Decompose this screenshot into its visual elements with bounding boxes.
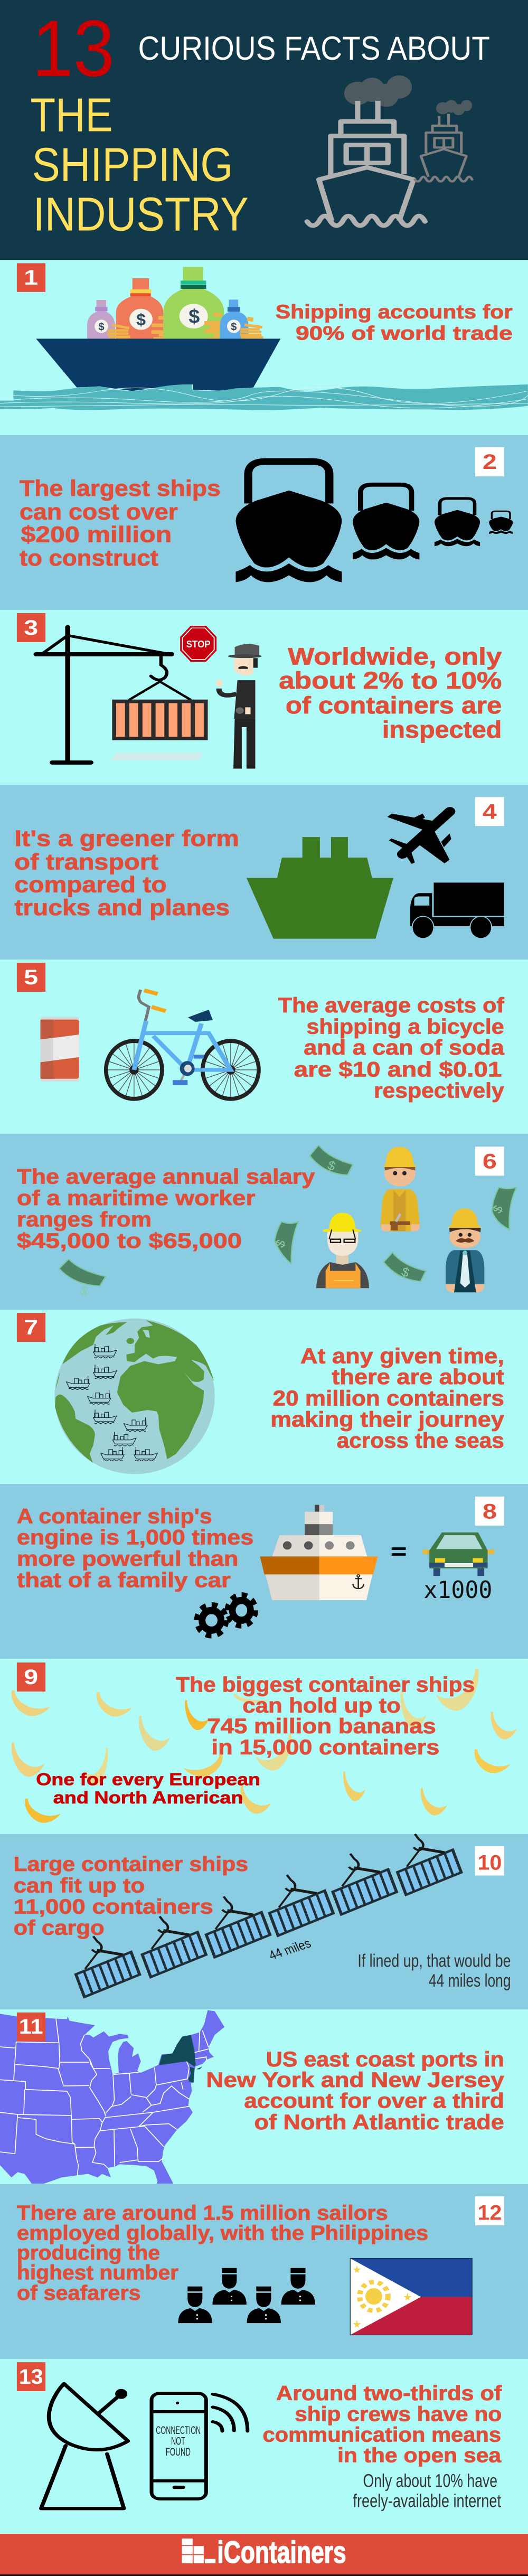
equals sign <box>392 1547 406 1556</box>
icon: cargo ship with money bags: $ <box>136 310 146 329</box>
label: x1000: x1000 <box>423 1576 492 1604</box>
panel: fact 4 <box>0 785 528 960</box>
badge 7 <box>17 1313 45 1342</box>
panel: fact 12 <box>0 2184 528 2359</box>
icon: falling banknotes: $ <box>490 1203 506 1216</box>
icon: crane with container <box>36 627 208 763</box>
icon: green ship <box>247 837 393 939</box>
text: 11,000 containers: Large container ships <box>14 1853 248 1876</box>
badge 5 <box>17 963 45 992</box>
text: annual salary: ranges from <box>17 1208 152 1231</box>
text: engine power: that of a family car <box>17 1569 231 1592</box>
text: 20 million containers: At any given time, <box>300 1344 504 1368</box>
badge 4 <box>475 797 504 826</box>
footer <box>0 2534 528 2576</box>
text: 11,000 containers: can fit up to <box>14 1874 145 1897</box>
text: sailors: highest number <box>17 2262 178 2284</box>
badge 1: 1 <box>24 266 38 289</box>
label: 44 miles: 44 miles <box>266 1936 313 1962</box>
badge 13: 13 <box>19 2365 43 2389</box>
text: costs of shipping: and a can of soda <box>304 1036 504 1059</box>
text: east coast ports: account for over a third <box>244 2089 504 2112</box>
badge 1 <box>17 263 45 292</box>
icon: Philippines flag <box>350 2259 472 2335</box>
text: costs of shipping: The average costs of <box>278 994 504 1017</box>
panel: fact 11 <box>0 2009 528 2185</box>
panel: fact 8 <box>0 1484 528 1659</box>
text: 11,000 containers <box>14 1853 248 1939</box>
icon: falling banknotes: $ <box>400 1265 411 1281</box>
text: greener form of transport: It's a greener form <box>14 826 239 851</box>
badge 8 <box>475 1497 504 1526</box>
icon: plane <box>387 812 451 864</box>
icon: phone with no connection: NOT <box>171 2435 185 2447</box>
text: largest ships cost: $200 million <box>21 522 172 547</box>
panel: fact 5 <box>0 960 528 1134</box>
text: 11,000 containers: of cargo <box>14 1916 105 1939</box>
badge 9: 9 <box>24 1666 38 1689</box>
icon: worker in yellow <box>381 1147 420 1231</box>
text: annual salary <box>17 1165 315 1253</box>
text: 745 million bananas <box>176 1674 475 1759</box>
text: communication <box>262 2382 502 2467</box>
icon: falling banknotes: $ <box>326 1158 337 1174</box>
text: annual salary: of a maritime worker <box>17 1187 255 1210</box>
icon: cargo ship with money bags: $ <box>98 321 105 333</box>
text: one for every european <box>36 1770 260 1807</box>
text: 20 million containers: 20 million containers <box>273 1386 504 1410</box>
map: eastern United States <box>0 2010 224 2184</box>
title number 13: 13 <box>32 4 115 93</box>
icon: falling banknotes: $ <box>78 1283 90 1299</box>
badge 3 <box>17 613 45 642</box>
icon: falling banknotes <box>59 1145 516 1299</box>
badge 11: 11 <box>19 2015 43 2038</box>
text: sailors: of seafarers <box>17 2282 141 2305</box>
icon: phone with no connection: CONNECTION <box>156 2424 201 2436</box>
icon: phone with no connection <box>152 2393 248 2499</box>
text: costs of shipping: shipping a bicycle <box>306 1015 504 1038</box>
text: shipping accounts: 90% of world trade <box>296 322 513 344</box>
icon: cargo ship with money bags: $ <box>188 305 200 327</box>
icon: scattered bananas <box>12 1668 517 1823</box>
badge 5: 5 <box>24 966 38 989</box>
panel: fact 3 <box>0 610 528 785</box>
text: if lined up <box>357 1951 511 1991</box>
text: largest ships cost: The largest ships <box>20 476 221 501</box>
icon: large steam ship outline <box>307 76 425 225</box>
icon: worker with moustache and tie <box>446 1208 484 1292</box>
text: 11,000 containers: 11,000 containers <box>14 1895 213 1919</box>
badge 10: 10 <box>477 1851 502 1874</box>
badge 6: 6 <box>483 1150 497 1173</box>
text: 20 million containers <box>270 1344 504 1452</box>
icon: row of hanging containers <box>74 1834 463 1999</box>
panel: fact 1 <box>0 260 528 435</box>
text: engine power: engine is 1,000 times <box>17 1526 253 1549</box>
text: costs of shipping <box>278 994 504 1102</box>
badge 3: 3 <box>24 616 38 640</box>
text: sailors: employed globally, with the Philippines <box>17 2222 428 2245</box>
text: containers inspected: Worldwide, only <box>288 643 502 670</box>
text: communication: ship crews have no <box>295 2403 502 2425</box>
text: 745 million bananas: 745 million bananas <box>207 1715 436 1738</box>
text: free internet <box>353 2470 501 2512</box>
badge 9 <box>17 1662 45 1691</box>
icon: four ships decreasing size <box>235 462 513 582</box>
icon: bicycle <box>106 990 259 1099</box>
text: costs of shipping: respectively <box>374 1079 504 1102</box>
text: east coast ports: New York and New Jersey <box>206 2069 504 2092</box>
icon: worker with glasses and vest <box>316 1213 369 1288</box>
text: communication: communication means <box>262 2423 501 2446</box>
text: sailors <box>17 2202 428 2305</box>
icon: four sailors <box>178 2268 315 2323</box>
icon: satellite dish <box>41 2384 128 2508</box>
badge 12 <box>475 2196 504 2225</box>
icon: falling banknotes: $ <box>272 1237 289 1250</box>
panel: fact 13 <box>0 2359 528 2534</box>
icon: cargo ship with money bags: $ <box>231 321 237 333</box>
text: 745 million bananas: The biggest container ships <box>176 1674 475 1697</box>
text: largest ships cost: to construct <box>20 546 158 571</box>
text: annual salary: The average annual salary <box>17 1165 315 1188</box>
text: shipping accounts <box>276 301 513 344</box>
text: containers inspected: of containers are <box>286 692 502 719</box>
icon: cargo ship with money bags <box>36 267 280 391</box>
text: 20 million containers: there are about <box>332 1365 504 1389</box>
text: largest ships cost <box>20 476 221 571</box>
badge 7: 7 <box>24 1316 38 1339</box>
icon: soda can <box>41 1017 79 1082</box>
panel: fact 6 <box>0 1134 528 1310</box>
badge 12: 12 <box>477 2202 502 2224</box>
text: engine power <box>17 1505 253 1592</box>
text: one for every european: One for every European <box>36 1770 260 1789</box>
icon: truck <box>410 882 504 938</box>
text: containers inspected: inspected <box>382 717 502 743</box>
title: the shipping industry: THE <box>30 89 113 142</box>
text: engine power: A container ship's <box>17 1505 212 1528</box>
panel: fact 10 <box>0 1834 528 2009</box>
panel: fact 2 <box>0 435 528 610</box>
badge 6 <box>475 1146 504 1176</box>
text: annual salary: $45,000 to $65,000 <box>17 1229 242 1253</box>
icon: car <box>422 1533 494 1576</box>
panel: fact 9 <box>0 1659 528 1835</box>
text: largest ships cost: can cost over <box>20 500 178 525</box>
text: east coast ports <box>206 2048 504 2134</box>
panel: fact 7 <box>0 1310 528 1484</box>
text: shipping accounts: Shipping accounts for <box>276 301 513 323</box>
text: 745 million bananas: can hold up to <box>242 1694 401 1717</box>
panel: header <box>0 0 528 260</box>
text: 20 million containers: making their journey <box>270 1407 504 1432</box>
icon: phone with no connection: FOUND <box>166 2446 191 2458</box>
badge 4: 4 <box>483 801 497 824</box>
text: communication: Around two-thirds of <box>276 2382 502 2405</box>
icon: gears <box>197 1595 256 1635</box>
icon: small steam ship outline <box>415 100 472 182</box>
title: the shipping industry <box>30 89 249 241</box>
icon: stop sign <box>180 626 216 662</box>
text: sailors: producing the <box>17 2242 160 2264</box>
text: containers inspected: about 2% to 10% <box>279 667 502 694</box>
badge 10 <box>475 1846 504 1875</box>
badge 8: 8 <box>483 1500 497 1523</box>
text: costs of shipping: are $10 and $0.01 <box>294 1058 502 1081</box>
text: east coast ports: of North Atlantic trade <box>254 2111 504 2134</box>
icon: white and orange ship <box>260 1505 378 1600</box>
waves <box>0 384 528 410</box>
icon: customs inspector <box>216 644 262 768</box>
logo: iContainers <box>182 2535 346 2570</box>
badge 2 <box>475 447 504 476</box>
text: containers inspected <box>279 643 502 743</box>
title: the shipping industry: INDUSTRY <box>33 188 249 241</box>
text: east coast ports: US east coast ports in <box>266 2048 504 2071</box>
text: engine power: more powerful than <box>17 1547 239 1571</box>
text: greener form of transport <box>14 826 239 920</box>
badge 2: 2 <box>483 450 497 474</box>
text: greener form of transport: of transport <box>14 850 158 875</box>
icon: globe with ships <box>54 1319 215 1474</box>
text: greener form of transport: trucks and planes <box>14 895 230 920</box>
text: communication: in the open sea <box>337 2445 502 2467</box>
text: sailors: There are around 1.5 million sailors <box>17 2202 388 2224</box>
text: greener form of transport: compared to <box>14 872 167 898</box>
icon: stop sign: STOP <box>186 639 211 650</box>
logo: iContainers: iContainers <box>217 2535 346 2570</box>
text: 745 million bananas: in 15,000 containers <box>212 1736 439 1759</box>
text: one for every european: and North American <box>53 1788 243 1807</box>
title: the shipping industry: SHIPPING <box>32 138 233 191</box>
text: 20 million containers: across the seas <box>337 1428 504 1452</box>
